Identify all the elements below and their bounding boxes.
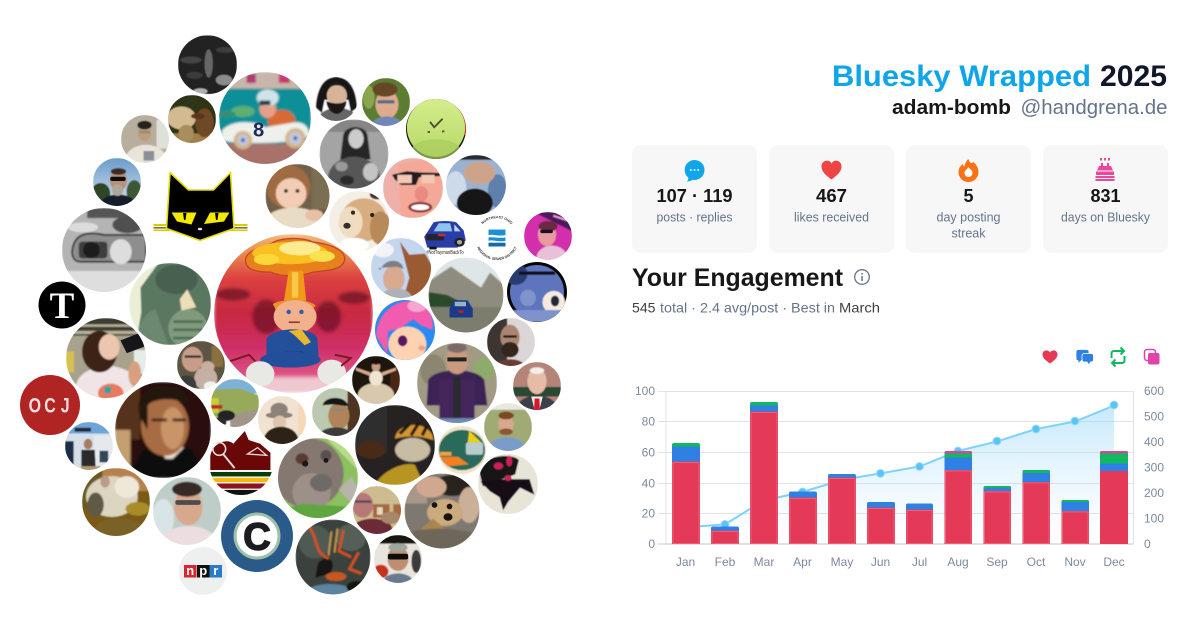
bar: Jan	[672, 443, 700, 544]
avatar: man in pink light	[524, 212, 572, 260]
engagement summary line: March	[839, 300, 880, 316]
avatar: man holding cat	[177, 341, 225, 393]
engagement summary line: total · 2.4 avg/post · Best in	[660, 300, 835, 316]
bar: Dec	[1100, 451, 1128, 544]
avatar: racing helmet	[438, 426, 486, 474]
bar: Aug	[944, 451, 972, 544]
month labels: Sep	[986, 555, 1008, 569]
avatar: racing car cartoon	[217, 72, 311, 166]
icon: birthday cake	[1096, 158, 1114, 181]
avatar: motorcycle in valley	[211, 379, 259, 428]
stat card: day posting streak: day posting	[936, 210, 1000, 224]
avatar: girl with camera	[66, 318, 146, 398]
icon: quotes squares	[1144, 350, 1160, 364]
avatar: NPR logo	[179, 547, 227, 595]
month labels: Apr	[793, 555, 812, 569]
right axis labels: 400	[1144, 435, 1164, 449]
bar: Jun	[867, 502, 895, 544]
avatar: Northeast Ohio Regional Sewer District logo: REGIONAL SEWER DISTRICT	[477, 246, 517, 260]
stat card: day posting streak: 5	[963, 186, 974, 206]
avatar: person with hat	[258, 396, 306, 444]
bar: May	[828, 474, 856, 544]
avatar: kaiju illustration	[129, 263, 211, 348]
left axis labels: 40	[642, 476, 655, 490]
avatar: two dogs	[167, 95, 216, 145]
stat card: days on Bluesky: 831	[1090, 186, 1120, 206]
right axis labels: 600	[1144, 384, 1164, 398]
heading: Your Engagement: Your Engagement	[632, 264, 844, 292]
avatar: New York Times logo	[38, 282, 86, 328]
right axis labels: 500	[1144, 410, 1164, 424]
avatar: dark sketch	[178, 35, 237, 94]
avatar: NPR logo: r	[213, 563, 218, 578]
avatar: man in purple hoodie	[417, 343, 497, 425]
avatar: black cat logo	[154, 172, 248, 240]
avatar: man with potato	[352, 486, 402, 540]
legend icons	[1042, 348, 1160, 366]
avatar: woman in ballgown	[352, 356, 400, 408]
avatar: dragon woodblock print	[296, 520, 370, 599]
left axis labels	[635, 384, 655, 551]
avatar: copyright C logo: C	[243, 516, 271, 558]
cumulative area	[686, 406, 1114, 544]
avatar: bald bearded man	[487, 318, 535, 366]
avatar: fluffy white cat	[82, 468, 150, 537]
avatar bubble cluster	[20, 35, 572, 595]
icon: flame	[958, 159, 978, 182]
avatar: man in ball cap	[312, 388, 360, 436]
avatar: framed blue scene	[503, 262, 567, 322]
icon: likes heart	[1042, 350, 1058, 364]
chart: monthly engagement stacked bars with cumulative line	[635, 384, 1164, 569]
stacked bars	[672, 402, 1128, 544]
bar: Feb	[711, 526, 739, 544]
cumulative line	[686, 406, 1114, 527]
avatar: dog lounging on couch	[404, 474, 481, 550]
bar: Mar	[750, 402, 778, 544]
left axis labels: 20	[642, 506, 655, 520]
icon: chat bubble	[685, 160, 704, 181]
avatar: copyright C logo	[221, 500, 293, 572]
avatar: bald man with red tie	[513, 362, 561, 410]
left axis labels: 100	[635, 384, 655, 398]
avatar: NPR logo: p	[199, 563, 207, 578]
avatar: glasses caricature	[383, 158, 443, 218]
stat card: likes received: 467	[816, 186, 847, 206]
avatar: man in lab coat	[121, 115, 169, 163]
profile name and handle: adam-bomb	[892, 97, 1011, 119]
avatar: black ink splatter	[478, 454, 538, 514]
avatar: maroon runner logo	[209, 431, 273, 495]
avatar: OCJ logo	[20, 375, 80, 435]
avatar: man in tuxedo	[115, 382, 211, 478]
month labels	[676, 555, 1125, 569]
cumulative points	[682, 401, 1118, 531]
engagement summary line	[632, 300, 880, 316]
profile name and handle: @handgrena.de	[1020, 97, 1168, 119]
month labels: Oct	[1027, 555, 1046, 569]
left axis labels: 60	[642, 446, 655, 460]
avatar: wombat with flowers	[273, 438, 358, 520]
right axis labels: 300	[1144, 460, 1164, 474]
y axis gridlines	[658, 391, 1134, 544]
icon: info	[855, 270, 869, 284]
month labels: Jul	[912, 555, 927, 569]
avatar: racing car cartoon: 8	[253, 119, 264, 141]
stat card: days on Bluesky	[1043, 145, 1168, 253]
right axis labels	[1144, 384, 1164, 551]
avatar: man in mirrored sunglasses	[373, 535, 422, 589]
icon: reposts arrows	[1112, 348, 1124, 366]
avatar: NPR logo: n	[186, 563, 194, 578]
bar: Jul	[906, 504, 933, 544]
icon: replies bubbles	[1076, 350, 1094, 365]
avatar: green ball	[406, 99, 467, 160]
bar: Nov	[1062, 500, 1089, 544]
avatar: anime pink hair	[375, 300, 435, 362]
stat card: posts and replies	[632, 145, 757, 253]
stat card: posts and replies: posts · replies	[656, 210, 733, 224]
avatar: bearded cartoon	[315, 77, 358, 121]
title: Bluesky Wrapped 2025: Bluesky Wrapped	[832, 60, 1091, 93]
bar: Sep	[984, 486, 1011, 544]
avatar: cat in cycling helmet	[355, 405, 435, 485]
month labels: Aug	[947, 555, 969, 569]
month labels: Mar	[754, 555, 774, 569]
avatar: black and white camera in mirror	[62, 208, 146, 296]
left axis labels: 80	[642, 414, 655, 428]
month labels: Jun	[871, 555, 890, 569]
bar: Apr	[789, 492, 817, 544]
right axis labels: 100	[1144, 512, 1164, 526]
month labels: Feb	[715, 555, 736, 569]
month labels: Nov	[1064, 555, 1086, 569]
stat card: posts and replies: 107 · 119	[656, 186, 732, 206]
avatar: Adam Bomb mushroom cloud	[214, 234, 373, 393]
avatar: man in shirt with glasses	[153, 477, 221, 545]
stat card: days on Bluesky: days on Bluesky	[1061, 210, 1150, 224]
engagement summary line: 545	[632, 300, 656, 316]
avatar: man with round glasses	[362, 78, 410, 126]
avatar: smiling toddler	[266, 164, 330, 228]
stat card: likes received: likes received	[794, 210, 869, 224]
avatar: man with cap and horse	[371, 238, 431, 298]
avatar: man under street sign	[65, 422, 113, 471]
month labels: Dec	[1103, 555, 1125, 569]
avatar: blue car in mountains	[428, 258, 504, 334]
stat card: day posting streak: streak	[952, 225, 986, 240]
avatar: man lying with black cat	[445, 155, 507, 217]
month labels: Jan	[676, 555, 695, 569]
avatar: Northeast Ohio Regional Sewer District logo: NORTHEAST OHIO	[481, 216, 512, 224]
profile name and handle	[892, 97, 1168, 119]
title: Bluesky Wrapped 2025: 2025	[1100, 60, 1167, 93]
avatar: blue car sticker	[424, 221, 466, 256]
bar: Oct	[1022, 470, 1050, 544]
stat card: likes received	[769, 145, 894, 253]
avatar: man in blue shirt	[484, 403, 532, 451]
avatar: Northeast Ohio Regional Sewer District logo	[477, 216, 517, 260]
avatar: OCJ logo: OCJ	[29, 393, 70, 417]
avatar: New York Times logo: T	[50, 286, 75, 327]
avatar: man with sunglasses outdoors	[93, 158, 141, 206]
avatar: golden retriever	[329, 190, 391, 252]
right axis labels: 200	[1144, 486, 1164, 500]
stat card: day posting streak	[906, 145, 1031, 253]
avatar: woman black and white	[320, 120, 388, 188]
avatar: blue car sticker: #NotTwymanBackTo	[426, 250, 464, 256]
icon: heart	[822, 161, 842, 180]
left axis labels: 0	[648, 537, 655, 551]
right axis labels: 0	[1144, 537, 1151, 551]
month labels: May	[831, 555, 853, 569]
